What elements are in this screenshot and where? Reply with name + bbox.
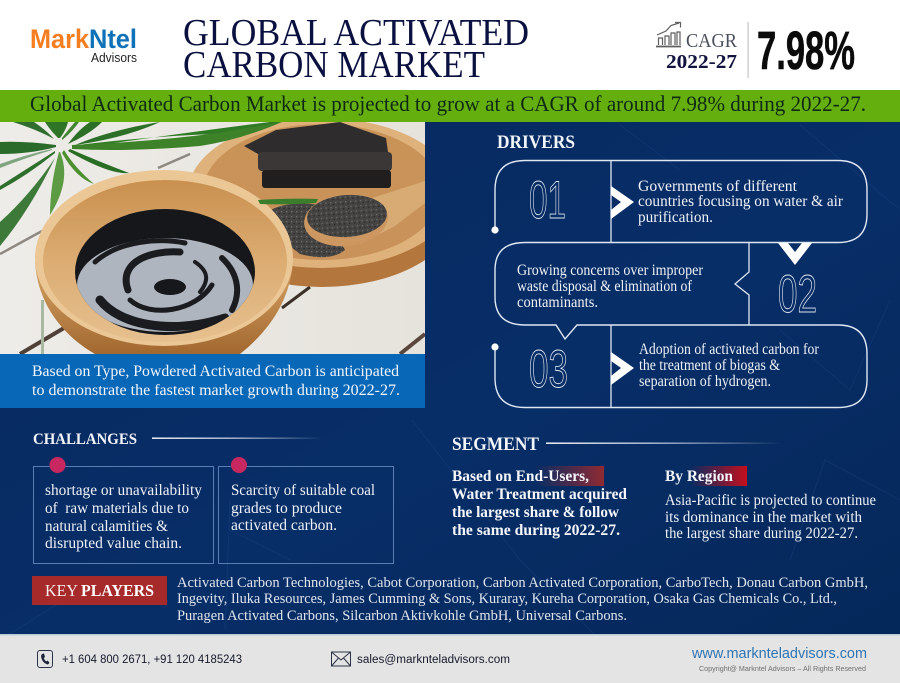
segment: end-users: [452, 466, 627, 539]
driver 1: [529, 171, 844, 230]
website and copyright: www.marknteladvisors.com: [691, 645, 867, 662]
driver 1: 01: [529, 171, 566, 230]
driver 3: [529, 340, 820, 399]
panel: challenge 1: natural calamities &: [45, 518, 168, 535]
driver 1: Governments of different: [638, 178, 798, 195]
heading: segment: SEGMENT: [452, 434, 539, 455]
driver 1: purification.: [638, 209, 713, 226]
key players badge: KEY: [45, 581, 78, 600]
segment: end-users: the same during 2022-27.: [452, 522, 620, 539]
key players badge: PLAYERS: [81, 581, 154, 600]
logo: MarkNtel Advisors: Mark: [30, 24, 90, 54]
bowl: [35, 170, 293, 354]
segment: by region: its dominance in the market with: [665, 509, 862, 526]
CAGR label: 2022-27: [666, 51, 737, 73]
panel: challenge 2: activated carbon.: [231, 517, 337, 534]
divider: [748, 22, 749, 78]
title: GLOBAL ACTIVATED: [183, 12, 529, 54]
panel: challenge 1: disrupted value chain.: [45, 535, 182, 552]
key players list: [177, 575, 868, 624]
driver 2: 02: [778, 265, 817, 324]
wooden plate: [193, 122, 425, 287]
driver 2: contaminants.: [517, 294, 598, 311]
callout: type segment: Based on Type, Powdered Activated Carbon is anticipated: [32, 363, 399, 380]
logo: MarkNtel Advisors: [30, 24, 137, 65]
driver 3: separation of hydrogen.: [639, 373, 771, 390]
segment: by region: [665, 466, 876, 542]
palm leaves: [0, 122, 282, 354]
CAGR label: CAGR: [686, 30, 738, 52]
key players list: Activated Carbon Technologies, Cabot Corporation, Carbon Activated Corporation, CarboTech, Donau Carbon GmbH,: [177, 575, 868, 591]
spoon with powder: [302, 181, 425, 250]
phone numbers: +1 604 800 2671, +91 120 4185243: [62, 654, 242, 666]
title: [183, 12, 529, 86]
powder pile: [268, 204, 345, 257]
email: sales@marknteladvisors.com: [357, 654, 510, 666]
key players list: Ingevity, Iluka Resources, James Cumming & Sons, Kuraray, Kureha Corporation, Osaka Gas Chemicals Co., Ltd.,: [177, 591, 837, 607]
website and copyright: [691, 645, 867, 673]
driver 2: [517, 262, 817, 324]
CAGR label: [666, 30, 738, 73]
segment: by region: By Region: [665, 468, 733, 485]
footer bar: [0, 634, 900, 683]
charcoal sticks: [244, 122, 392, 188]
panel: challenge 2: Scarcity of suitable coal: [231, 482, 375, 499]
icon: growth chart: [656, 22, 681, 46]
key players badge: [32, 576, 167, 605]
title: CARBON MARKET: [183, 44, 485, 86]
panel: drivers flow: [491, 160, 867, 408]
logo: MarkNtel Advisors: Advisors: [91, 50, 137, 65]
driver 1: countries focusing on water & air: [638, 193, 844, 210]
small leaf: [258, 199, 318, 204]
green summary banner: Global Activated Carbon Market is projected to grow at a CAGR of around 7.98% during 2022-27.: [30, 91, 866, 116]
driver 3: Adoption of activated carbon for: [639, 341, 820, 358]
driver 2: waste disposal & elimination of: [517, 278, 693, 295]
logo: MarkNtel Advisors: Ntel: [89, 24, 137, 54]
heading: drivers: DRIVERS: [497, 132, 575, 153]
connector outline: [495, 160, 867, 408]
website and copyright: Copyright@ Markntel Advisors – All Rights Reserved: [699, 664, 866, 673]
panel: challenge 2: [218, 457, 394, 564]
driver 3: the treatment of biogas &: [639, 357, 780, 374]
segment: end-users: Based on End-Users,: [452, 468, 589, 485]
panel: challenge 1: [34, 457, 214, 564]
panel: challenge 1: of raw materials due to: [45, 500, 189, 517]
panel: challenge 2: grades to produce: [231, 500, 342, 517]
driver 2: Growing concerns over improper: [517, 262, 704, 279]
segment: end-users: Water Treatment acquired: [452, 486, 627, 503]
photo: activated carbon in wooden bowls: [0, 118, 456, 354]
navy body background: [0, 122, 900, 640]
driver 3: 03: [529, 340, 568, 399]
segment: by region: Asia-Pacific is projected to continue: [665, 492, 876, 509]
segment: by region: the largest share during 2022-27.: [665, 525, 858, 542]
callout: type segment: [0, 354, 425, 408]
key players list: Puragen Activated Carbons, Silcarbon Aktivkohle GmbH, Universal Carbons.: [177, 608, 627, 624]
callout: type segment: to demonstrate the fastest market growth during 2022-27.: [32, 382, 400, 399]
icon: mail: [332, 652, 350, 666]
panel: challenge 1: shortage or unavailability: [45, 482, 202, 499]
icon: phone: [38, 650, 52, 668]
heading: challenges: CHALLANGES: [33, 431, 137, 448]
segment: end-users: the largest share & follow: [452, 504, 620, 521]
